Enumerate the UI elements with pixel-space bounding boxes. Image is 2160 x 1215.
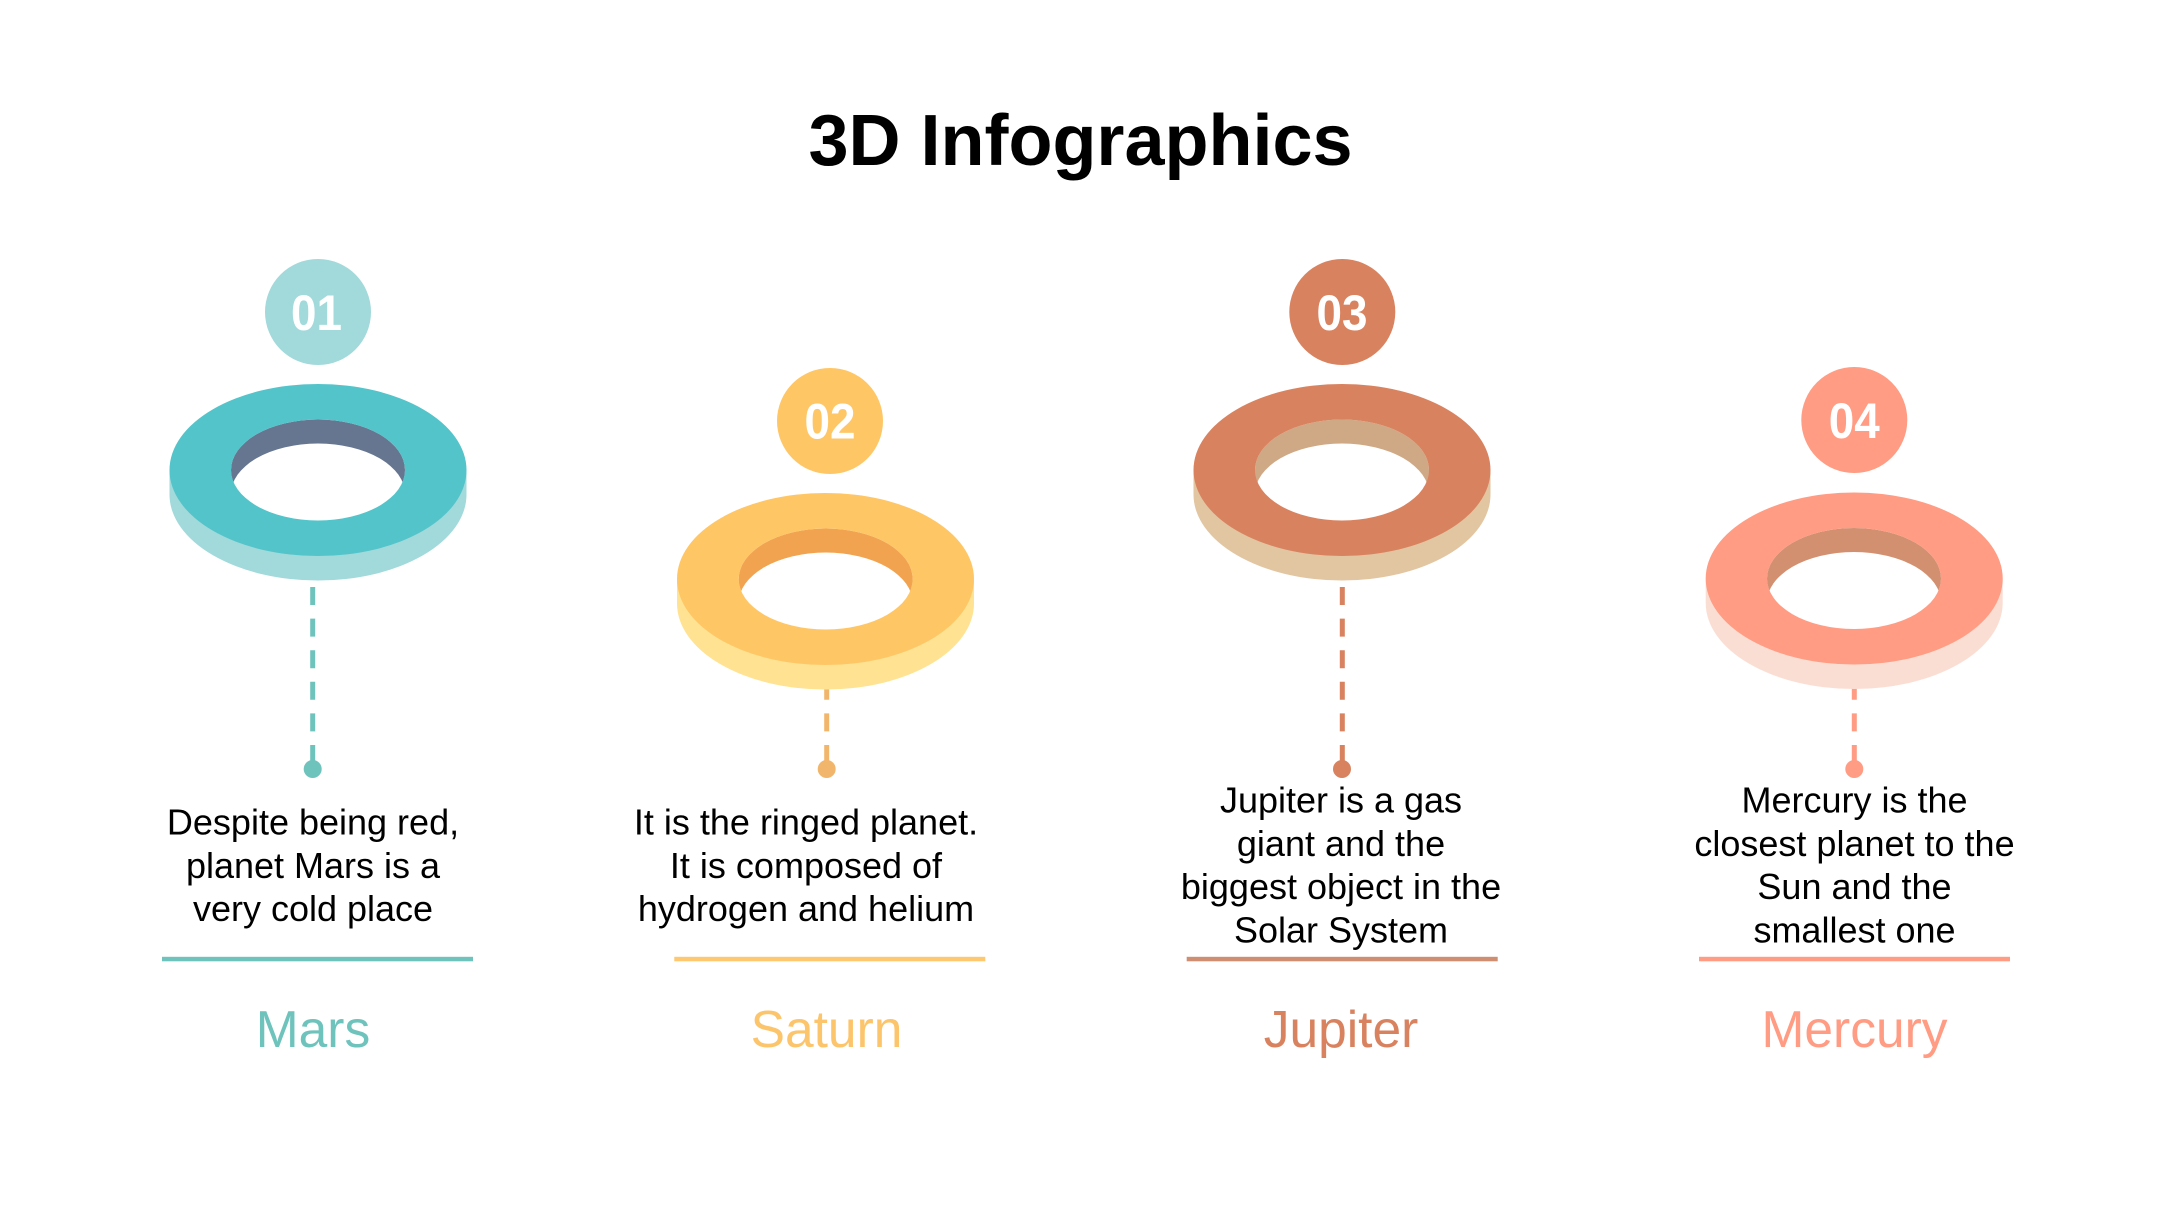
description: Mars: Despite being red, [167,802,459,842]
number badge 01 [265,259,371,365]
number badge 02: 02 [804,394,856,450]
label: Mars: Mars [256,1000,370,1058]
label: Mercury: Mercury [1762,1000,1948,1058]
connector: Jupiter dashed line [1333,587,1351,778]
number badge 04: 04 [1829,393,1880,449]
rule: Jupiter [1187,957,1498,961]
number badge 04 [1801,367,1907,473]
description: Saturn: It is composed of [670,845,943,886]
label: Saturn: Saturn [751,1000,902,1058]
number badge 02 [777,368,883,474]
3D ring: Jupiter [1194,384,1490,580]
rule: Saturn [674,957,985,961]
description: Saturn: It is the ringed planet. [634,802,978,842]
description: Mercury: smallest one [1753,909,1956,950]
label: Jupiter: Jupiter [1264,1000,1418,1058]
panel: Mars [162,259,473,1058]
description: Mars: very cold place [193,888,433,929]
description: Mercury: Sun and the [1757,866,1952,907]
description: Jupiter: biggest object in the [1181,866,1501,907]
description: Jupiter: giant and the [1237,823,1445,864]
connector: Saturn dashed line [818,587,836,778]
title: 3D Infographics [808,101,1353,181]
connector: Mars dashed line [304,587,322,778]
number badge 03: 03 [1316,285,1368,341]
description: Saturn: hydrogen and helium [638,888,974,929]
description: Jupiter: Solar System [1234,909,1448,950]
rule: Mars [162,957,473,961]
description: Jupiter: Jupiter is a gas [1220,780,1462,820]
panel: Mercury [1694,367,2015,1058]
number badge 01: 01 [291,285,342,341]
panel: Jupiter [1181,259,1501,1058]
description: Mercury: Mercury is the [1741,780,1968,820]
panel: Saturn [634,368,985,1058]
3D ring: Mars [170,384,466,580]
rule: Mercury [1699,957,2010,961]
description: Mars: planet Mars is a [186,845,441,886]
connector: Mercury dashed line [1845,587,1863,778]
3D ring: Saturn [677,493,974,690]
3D ring: Mercury [1706,492,2003,689]
number badge 03 [1289,259,1395,365]
description: Mercury: closest planet to the [1694,823,2015,864]
